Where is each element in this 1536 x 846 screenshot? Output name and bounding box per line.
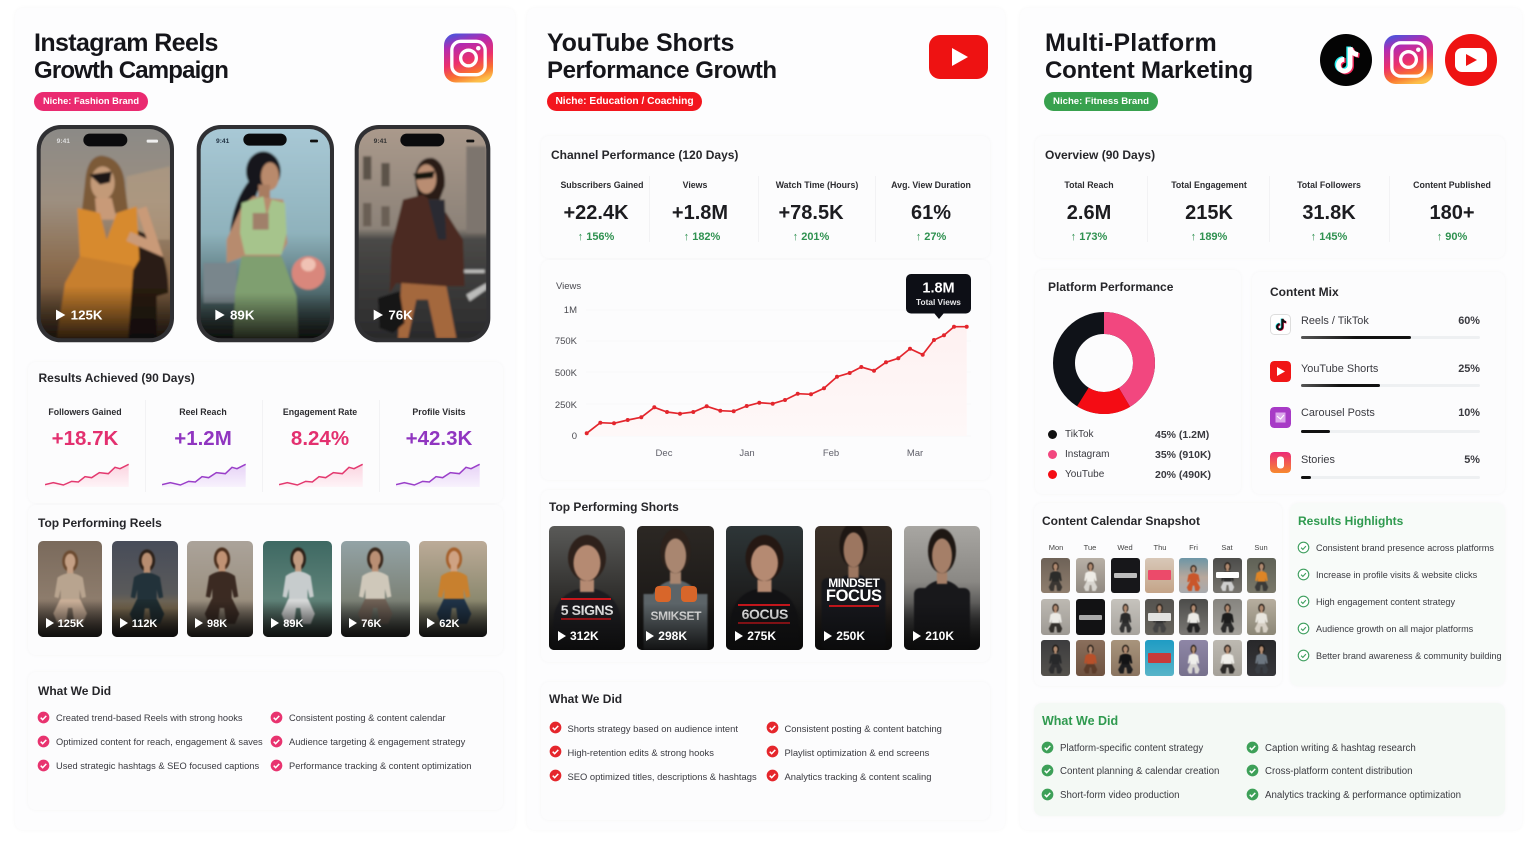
stat: Avg. View Duration: ↑ 27% <box>916 231 946 243</box>
day tile <box>1213 640 1242 676</box>
stat: Avg. View Duration: Avg. View Duration <box>891 180 971 190</box>
legend: TikTok: 45% (1.2M) <box>1155 429 1209 441</box>
stat: Views: Views <box>683 180 707 190</box>
weekday labels: Thu <box>1154 543 1166 552</box>
reel thumbnail 125K: 125K <box>58 618 84 630</box>
reel thumbnail 98K: 98K <box>207 618 227 630</box>
short thumbnail 250K: 250K <box>836 629 865 643</box>
heading: Channel Performance (120 Days) <box>551 148 738 162</box>
row: Stories <box>1270 452 1480 480</box>
icon: Instagram <box>1384 35 1433 84</box>
list item <box>1041 743 1241 755</box>
heading: Platform Performance <box>1048 280 1173 294</box>
day tile <box>1041 640 1070 676</box>
donut chart <box>1053 312 1155 414</box>
day tile <box>1145 640 1174 676</box>
reel thumbnail 112K <box>112 541 178 637</box>
heading: Results Highlights <box>1298 514 1403 528</box>
list item: Consistent posting & content calendar <box>289 713 446 723</box>
icon: YouTube <box>929 35 988 79</box>
phone mockup: orange outfit, 125K: 125K <box>71 308 103 323</box>
legend: Instagram <box>1048 449 1211 461</box>
list item: Short-form video production <box>1060 790 1180 801</box>
heading: What We Did <box>38 684 111 698</box>
reel thumbnail 125K <box>38 541 102 637</box>
chart plot: Mar <box>907 448 923 459</box>
stat: Reel Reach <box>162 407 246 487</box>
stat: Total Reach: ↑ 173% <box>1071 231 1107 243</box>
section: Platform Performance <box>1035 270 1241 494</box>
section: Channel Performance <box>541 136 990 258</box>
callout: total views: Total Views <box>916 297 961 307</box>
section: What We Did (Fitness) <box>1034 703 1505 816</box>
stat: Profile Visits <box>396 407 480 487</box>
stat: Subscribers Gained: ↑ 156% <box>578 231 614 243</box>
short thumbnail 210K <box>904 526 980 650</box>
list item <box>1297 570 1505 582</box>
list item: Performance tracking & content optimization <box>289 761 471 771</box>
weekday labels: Sun <box>1254 543 1268 552</box>
row: Reels / TikTok: 60% <box>1458 315 1480 327</box>
stat: Content Published: ↑ 90% <box>1437 231 1467 243</box>
stat: Total Engagement: 215K <box>1185 202 1233 224</box>
chart plot: Views <box>556 281 581 292</box>
short thumbnail 312K <box>549 526 625 650</box>
phone mockup: orange outfit, 125K <box>36 125 174 342</box>
list item: Analytics tracking & performance optimization <box>1265 790 1461 801</box>
phone mockup: brown blazer, 76K <box>354 125 490 342</box>
stat: Views <box>672 180 728 243</box>
title: Content Marketing <box>1045 56 1253 84</box>
day tile <box>1247 640 1276 676</box>
list item: Audience growth on all major platforms <box>1316 624 1473 634</box>
heading: Results Achieved (90 Days) <box>38 371 195 385</box>
stat: Views: +1.8M <box>672 202 728 224</box>
weekday labels: Tue <box>1084 543 1096 552</box>
phone mockup: brown blazer, 76K: 9:41 <box>374 138 388 145</box>
chart plot: Feb <box>823 448 839 459</box>
list item: Consistent posting & content batching <box>784 723 942 734</box>
chart plot: 750K <box>555 336 578 347</box>
stat: Total Followers <box>1297 180 1361 243</box>
stat: Engagement Rate: Engagement Rate <box>283 407 357 417</box>
list item <box>1297 597 1505 609</box>
title <box>34 29 228 84</box>
legend: YouTube: YouTube <box>1065 469 1104 480</box>
stat: Total Reach <box>1064 180 1114 243</box>
stat: Engagement Rate <box>279 407 363 487</box>
short thumbnail 250K: MINDSET <box>828 576 879 590</box>
niche tag <box>1044 92 1158 111</box>
day tile <box>1041 558 1070 593</box>
panel: Multi-Platform content marketing <box>1020 8 1522 830</box>
reel thumbnail 89K: 89K <box>283 618 303 630</box>
chart plot: 1M <box>564 305 577 316</box>
list item: Cross-platform content distribution <box>1265 766 1413 777</box>
short thumbnail 298K: SMIKSET <box>651 609 701 623</box>
stat: Subscribers Gained: Subscribers Gained <box>560 180 644 190</box>
stat: Total Followers: 31.8K <box>1302 202 1356 224</box>
stat: Views: ↑ 182% <box>684 231 720 243</box>
section: Top Performing Reels <box>28 505 503 655</box>
title: Multi-Platform <box>1045 29 1217 57</box>
section: What We Did (Instagram) <box>28 672 503 810</box>
heading: Top Performing Shorts <box>549 500 679 514</box>
reel thumbnail 62K: 62K <box>439 618 459 630</box>
stat: Total Followers: ↑ 145% <box>1311 231 1347 243</box>
chart plot <box>555 281 969 459</box>
stat: Watch Time <box>776 180 858 243</box>
list item: High engagement content strategy <box>1316 597 1455 607</box>
list item: Better brand awareness & community building <box>1316 651 1502 661</box>
section: Content Calendar Snapshot <box>1034 503 1282 686</box>
day tile <box>1111 640 1140 676</box>
row: Reels / TikTok <box>1270 314 1480 339</box>
stat: Watch Time: ↑ 201% <box>793 231 829 243</box>
callout: total views <box>906 274 971 319</box>
row: YouTube Shorts: 25% <box>1458 363 1480 375</box>
reel thumbnail 76K <box>341 541 410 637</box>
niche tag <box>34 92 148 111</box>
list item: Playlist optimization & end screens <box>784 747 929 758</box>
day tile <box>1179 558 1208 593</box>
short thumbnail 275K: 6OCUS <box>742 606 788 622</box>
weekday labels: Mon <box>1049 543 1063 552</box>
phone mockup: orange outfit, 125K: 9:41 <box>57 138 70 145</box>
row: Carousel Posts <box>1270 407 1480 435</box>
stat: Followers Gained: Followers Gained <box>48 407 122 417</box>
stat: Total Followers: Total Followers <box>1297 180 1361 190</box>
heading: What We Did <box>549 692 622 706</box>
reel thumbnail 89K <box>263 541 332 637</box>
row: YouTube Shorts: YouTube Shorts <box>1301 363 1378 375</box>
title <box>1045 29 1253 84</box>
stat: Watch Time: +78.5K <box>778 202 844 224</box>
stat: Avg. View Duration: 61% <box>911 202 951 224</box>
day tile <box>1179 640 1208 676</box>
short thumbnail 210K: 210K <box>925 629 954 643</box>
heading: What We Did <box>1042 714 1118 728</box>
icon: Instagram <box>444 34 493 82</box>
list item: Increase in profile visits & website clicks <box>1316 570 1477 580</box>
niche tag: Niche: Fashion Brand <box>43 96 139 106</box>
list item: Analytics tracking & content scaling <box>784 771 931 782</box>
panel: YouTube Shorts performance <box>527 8 1005 830</box>
list item: Created trend-based Reels with strong hooks <box>56 713 243 723</box>
reel thumbnail 98K <box>187 541 253 637</box>
callout: total views: 1.8M <box>922 280 955 296</box>
weekday labels: Wed <box>1117 543 1133 552</box>
stat: Subscribers Gained: +22.4K <box>563 202 629 224</box>
stat: Reel Reach: Reel Reach <box>179 407 227 417</box>
legend: YouTube: 20% (490K) <box>1155 469 1211 481</box>
list item <box>1041 790 1241 802</box>
weekday labels: Sat <box>1221 543 1234 552</box>
chart plot: Dec <box>656 448 673 459</box>
short thumbnail 250K <box>815 526 892 650</box>
title: YouTube Shorts <box>547 29 734 57</box>
list item: SEO optimized titles, descriptions & hashtags <box>568 771 757 782</box>
phone mockup: brown blazer, 76K: 76K <box>389 308 413 323</box>
icon: YouTube <box>1445 34 1497 86</box>
short thumbnail 298K: 298K <box>658 629 687 643</box>
list item: Optimized content for reach, engagement & saves <box>56 737 263 747</box>
chart plot: 250K <box>555 400 578 411</box>
list item <box>1246 766 1486 778</box>
legend: Instagram: 35% (910K) <box>1155 449 1211 461</box>
short thumbnail 312K: 5 SIGNS <box>561 602 613 618</box>
section: Results Achieved <box>28 362 503 503</box>
reel thumbnail 76K: 76K <box>361 618 381 630</box>
day tile <box>1076 599 1105 635</box>
line chart: views over time <box>541 260 990 480</box>
legend: YouTube <box>1048 469 1211 481</box>
panel: Instagram Reels campaign <box>34 33 493 772</box>
stat: Total Engagement: Total Engagement <box>1171 180 1247 190</box>
stat: Reel Reach: +1.2M <box>174 427 232 450</box>
section: Top Performing Shorts <box>541 490 990 662</box>
stat: Content Published: Content Published <box>1413 180 1491 190</box>
reel thumbnail 62K <box>419 541 487 637</box>
stat: Content Published <box>1413 180 1491 243</box>
day tile <box>1213 599 1242 635</box>
short thumbnail 275K: 275K <box>747 629 776 643</box>
day tile <box>1145 599 1174 635</box>
day tile <box>1145 558 1174 593</box>
stat: Followers Gained: +18.7K <box>52 427 118 450</box>
title <box>547 29 777 84</box>
weekday labels: Fri <box>1189 543 1198 552</box>
title: Performance Growth <box>547 56 777 84</box>
weekday labels <box>1034 540 1282 554</box>
legend: TikTok <box>1048 429 1209 441</box>
stat: Total Engagement: ↑ 189% <box>1191 231 1227 243</box>
phone mockup: green outfit, 89K: 9:41 <box>216 138 230 145</box>
stat: Profile Visits: Profile Visits <box>412 407 466 417</box>
icon: TikTok <box>1320 34 1372 86</box>
short thumbnail 275K <box>726 526 803 650</box>
stat: Engagement Rate: 8.24% <box>291 427 349 450</box>
list item: Audience targeting & engagement strategy <box>289 737 465 747</box>
calendar grid <box>1041 558 1276 676</box>
row: Stories: 5% <box>1464 454 1480 466</box>
stat: Subscribers Gained <box>560 180 644 243</box>
short thumbnail 298K <box>637 526 714 650</box>
stat: Content Published: 180+ <box>1429 202 1475 224</box>
chart plot: 500K <box>555 368 578 379</box>
day tile <box>1247 599 1276 635</box>
day tile <box>1111 599 1140 635</box>
section: Content Mix <box>1252 272 1505 494</box>
section: Overview <box>1035 136 1505 258</box>
list item: High-retention edits & strong hooks <box>568 747 714 758</box>
list item <box>1246 743 1486 755</box>
list item: Consistent brand presence across platforms <box>1316 543 1494 553</box>
legend: TikTok: TikTok <box>1065 429 1094 440</box>
section: What We Did (YouTube) <box>541 682 990 820</box>
day tile <box>1076 558 1105 593</box>
short thumbnail 312K: 312K <box>570 629 599 643</box>
heading: Content Calendar Snapshot <box>1042 514 1200 528</box>
heading: Top Performing Reels <box>38 516 162 530</box>
title: Growth Campaign <box>34 56 228 84</box>
heading: Overview (90 Days) <box>1045 148 1155 162</box>
stat: Avg. View Duration <box>891 180 971 243</box>
stat: Watch Time: Watch Time (Hours) <box>776 180 858 190</box>
row: Reels / TikTok: Reels / TikTok <box>1301 315 1369 327</box>
legend: Instagram: Instagram <box>1065 449 1109 460</box>
row: Carousel Posts: 10% <box>1458 407 1480 419</box>
row: Carousel Posts: Carousel Posts <box>1301 407 1375 419</box>
day tile <box>1179 599 1208 635</box>
day tile <box>1213 558 1242 593</box>
stat: Total Reach: Total Reach <box>1064 180 1114 190</box>
day tile <box>1247 558 1276 593</box>
day tile <box>1111 558 1140 593</box>
niche tag: Niche: Fitness Brand <box>1053 96 1149 107</box>
stat: Followers Gained <box>45 407 129 487</box>
list item: Content planning & calendar creation <box>1060 766 1219 777</box>
phone mockup: green outfit, 89K <box>196 125 334 342</box>
list item: Caption writing & hashtag research <box>1265 743 1416 754</box>
day tile <box>1041 599 1070 635</box>
list item: Platform-specific content strategy <box>1060 743 1203 754</box>
day tile <box>1076 640 1105 676</box>
niche tag: Niche: Education / Coaching <box>555 96 694 107</box>
stat: Total Engagement <box>1171 180 1247 243</box>
list item: Shorts strategy based on audience intent <box>568 723 738 734</box>
short thumbnail 250K: FOCUS <box>826 587 882 605</box>
stat: Profile Visits: +42.3K <box>406 427 472 450</box>
list item <box>1297 624 1505 636</box>
niche tag <box>547 92 702 111</box>
heading: Content Mix <box>1270 285 1339 299</box>
phone mockup: green outfit, 89K: 89K <box>230 308 255 323</box>
row: Stories: Stories <box>1301 454 1335 466</box>
chart plot: Jan <box>739 448 755 459</box>
row: YouTube Shorts <box>1270 361 1480 387</box>
chart plot: 0 <box>572 431 577 442</box>
stat: Total Reach: 2.6M <box>1067 202 1111 224</box>
reel thumbnail 112K: 112K <box>132 618 157 630</box>
title: Instagram Reels <box>34 29 218 57</box>
section: Results Highlights <box>1290 503 1505 686</box>
list item: Used strategic hashtags & SEO focused captions <box>56 761 259 771</box>
